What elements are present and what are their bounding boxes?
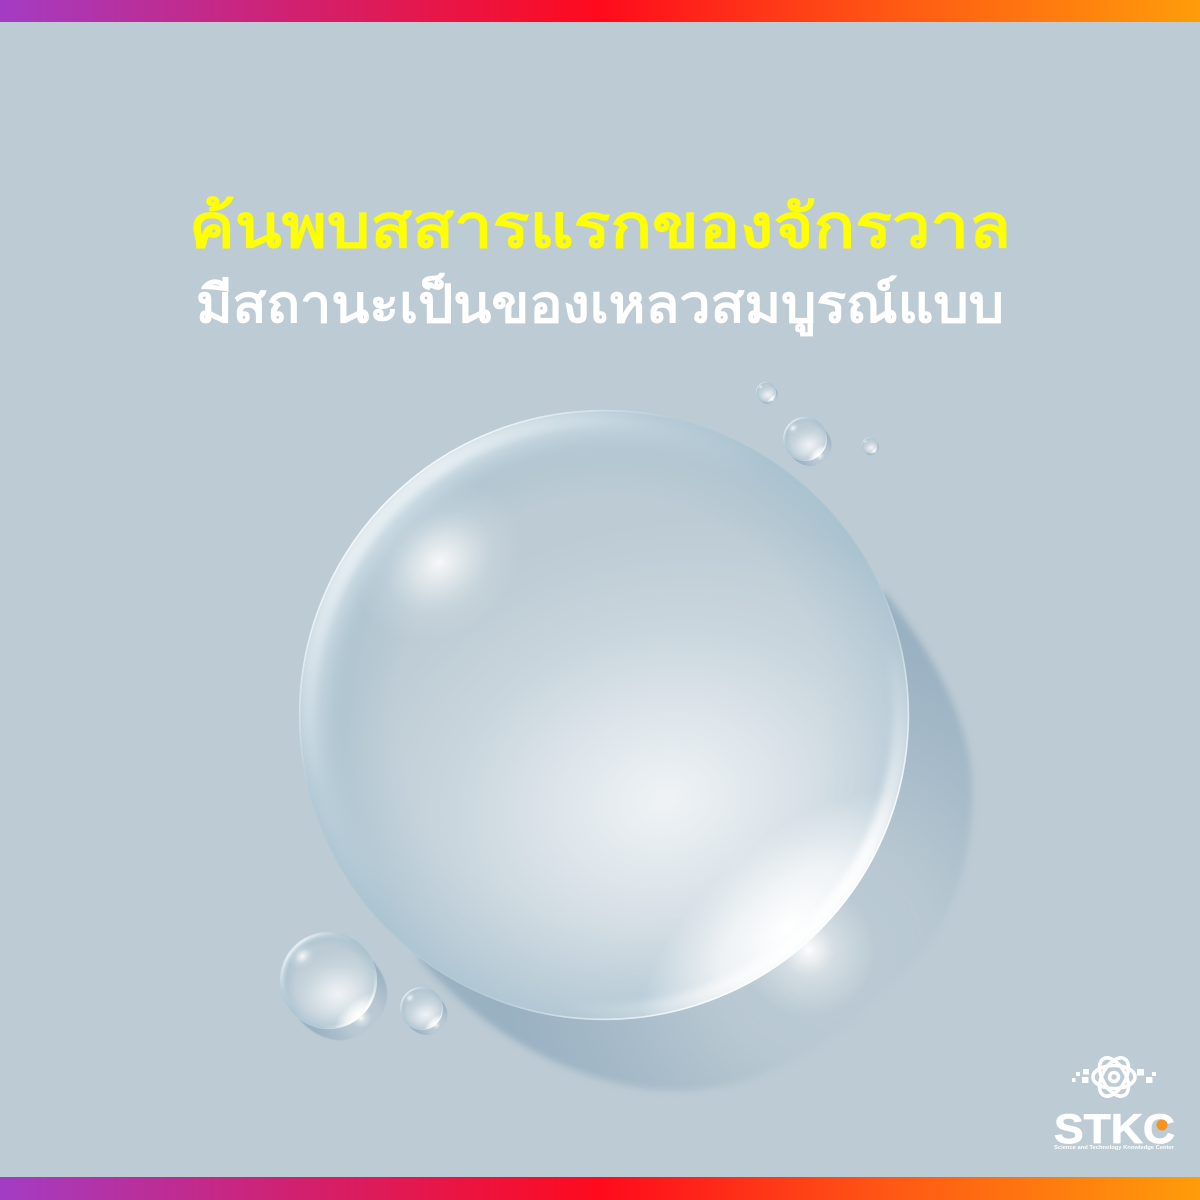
top gradient bar: [0, 0, 1200, 22]
logo tagline: Science and Technology Knowledge Center: [1054, 1145, 1175, 1151]
title: [189, 193, 1011, 337]
small drop: top left tiny: [755, 382, 781, 406]
small drop: lower left small: [398, 987, 454, 1039]
logo atom icon: [1093, 1053, 1135, 1101]
logo wordmark: STKC: [1054, 1105, 1175, 1152]
small drop: lower left large: [274, 932, 402, 1049]
small drop: top centre: [780, 417, 838, 470]
title line 1: ค้นพบสสารแรกของจักรวาล: [189, 193, 1011, 260]
main liquid drop: [264, 410, 1066, 1148]
bottom gradient bar: [0, 1177, 1200, 1200]
logo pixel squares: [1072, 1069, 1156, 1083]
title line 2: มีสถานะเป็นของเหลวสมบูรณ์แบบ: [196, 273, 1004, 337]
STKC logo: [1054, 1053, 1175, 1152]
small drop: top right tiny: [861, 438, 882, 457]
logo orange dot: [1156, 1120, 1168, 1130]
